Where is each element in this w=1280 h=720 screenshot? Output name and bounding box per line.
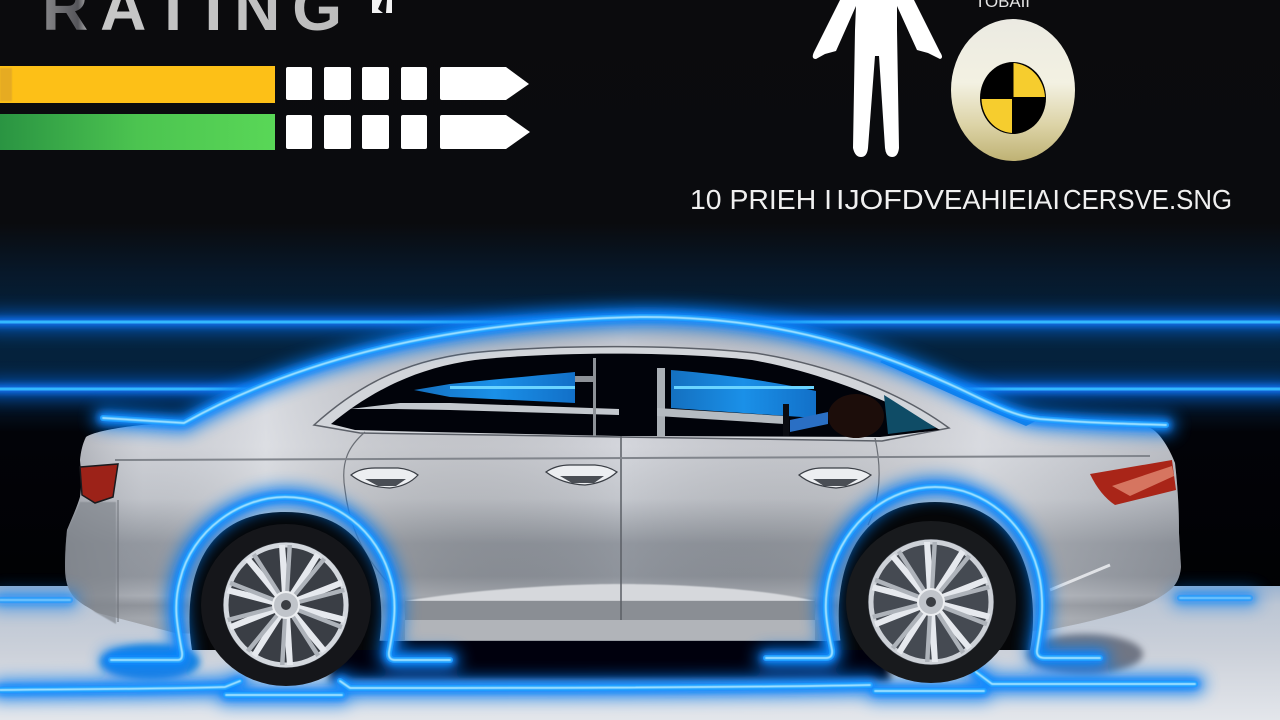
blue roof band [880, 358, 1040, 426]
reflection: front window [657, 368, 936, 438]
wheel well right [839, 502, 1033, 650]
icon: crash test marker [951, 19, 1075, 161]
door and body lines [115, 432, 1150, 622]
reflection: rear window [350, 358, 619, 436]
taillight left [80, 464, 118, 503]
neon car outline [0, 317, 1250, 695]
taillight right [1090, 460, 1176, 505]
wheel well left [189, 512, 381, 650]
background neon lines [0, 322, 1280, 389]
rating bar: yellow row [0, 66, 529, 103]
caption: IJOFDV [836, 184, 944, 215]
caption: CERSVE.SNG [1063, 184, 1232, 215]
car [65, 317, 1181, 682]
caption: EAHIEIAI [944, 184, 1060, 215]
lower sill highlight [405, 584, 815, 601]
caption: 10 PRIEH I [690, 184, 832, 215]
car body [65, 317, 1181, 641]
wheel: front right [846, 521, 1016, 683]
caption [690, 184, 1232, 215]
underbody shadow [330, 632, 890, 682]
rear bumper [66, 502, 116, 624]
rating bar: green row [0, 114, 530, 150]
window glass [331, 354, 940, 437]
floor shadow right [1027, 634, 1143, 674]
small icon by title [372, 0, 392, 13]
wheel: rear left [201, 524, 371, 686]
body shading [65, 317, 1181, 641]
floor [0, 586, 1280, 720]
door handles [351, 465, 871, 488]
icon: human figure [813, 0, 942, 157]
floor glow pool left [100, 644, 200, 680]
window frame [314, 347, 949, 441]
